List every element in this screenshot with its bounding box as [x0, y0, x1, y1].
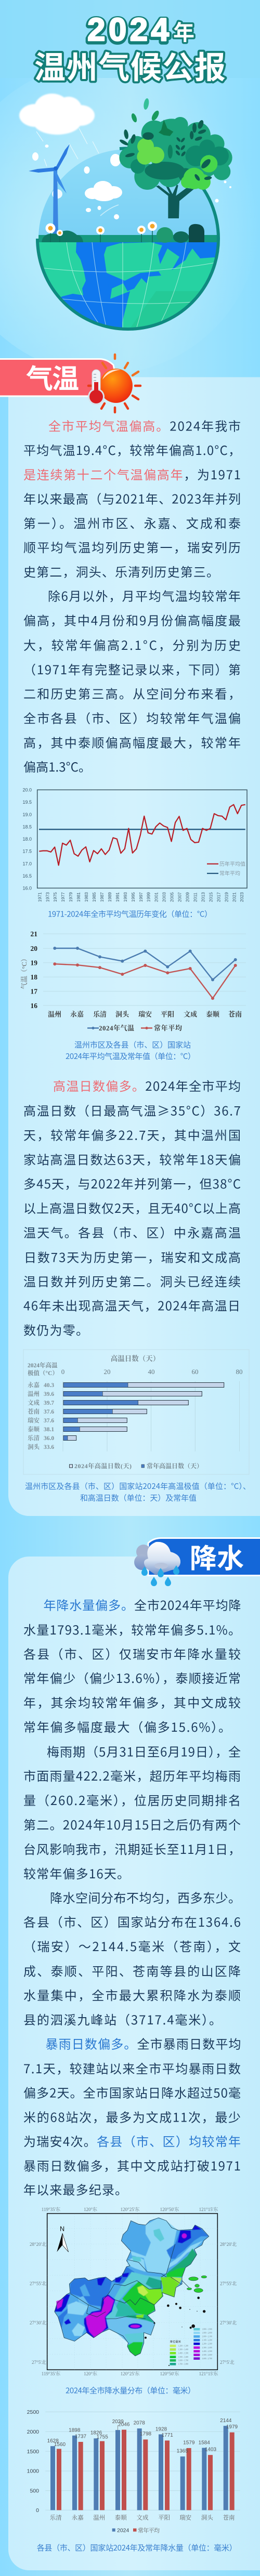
- y axis labels: [22, 787, 32, 891]
- category labels: [48, 1011, 242, 1018]
- legend: [207, 860, 245, 877]
- row labels: 39.7: [44, 1400, 54, 1406]
- line chart: annual temperature 1971-2024: [22, 787, 247, 902]
- row labels: 38.1: [44, 1427, 54, 1433]
- text block: annual precipitation: 台风影响我市，汛期延长至11月1日，: [23, 1839, 241, 1858]
- text block: annual mean temperature: 大，较常年偏高2.1°C，分别为历史: [23, 635, 241, 653]
- value labels: 1979: [226, 2424, 238, 2430]
- category labels: 苍南: [223, 2514, 235, 2521]
- row labels: 37.6: [44, 1418, 54, 1424]
- year labels: 1989: [107, 892, 112, 902]
- row labels: [28, 1381, 54, 1450]
- category labels: 永嘉: [72, 2514, 84, 2521]
- value labels: 1755: [97, 2435, 108, 2440]
- year labels: 2023: [239, 892, 244, 902]
- legend: 1,600 - 1,700: [178, 2360, 188, 2362]
- legend: 2024年高温日数(天): [74, 1462, 132, 1470]
- row labels: 永嘉: [28, 1381, 40, 1389]
- icon: rain cloud: [134, 1542, 180, 1586]
- y axis labels: 2500: [27, 2409, 39, 2415]
- y axis labels: 16: [30, 1002, 37, 1010]
- heading text: 降水: [190, 1537, 244, 1576]
- year labels: 2011: [192, 892, 198, 902]
- text block: annual precipitation: 常年偏少（偏少13.6%），泰顺接近常: [23, 1668, 241, 1686]
- year labels: 2005: [170, 892, 175, 902]
- row labels: 33.6: [44, 1444, 54, 1450]
- text block: annual precipitation: 降水空间分布不均匀，西多东少。: [50, 1888, 241, 1906]
- y axis labels: 20: [30, 945, 37, 952]
- text block: annual mean temperature: 偏高1.3°C。: [23, 757, 91, 775]
- value labels: 1928: [155, 2426, 167, 2432]
- caption: county temperature chart: 2024年平均气温及常年值（单位：°C）: [66, 1051, 196, 1062]
- legend: 1,200 - 1,300: [178, 2345, 188, 2348]
- legend: 1,400 - 1,500: [178, 2352, 188, 2355]
- text block: high temperature days: [23, 1076, 241, 1338]
- text block: high temperature days: 高温日数（日最高气温≥35°C）36.7: [23, 1101, 241, 1119]
- cloud above globe: [19, 94, 95, 135]
- inner clouds and drops: [52, 154, 122, 219]
- row labels: 37.6: [44, 1409, 54, 1415]
- text block: annual mean temperature: [23, 416, 241, 775]
- graticule: [47, 2214, 217, 2370]
- value labels: 1560: [54, 2442, 66, 2448]
- value labels: 2078: [134, 2421, 145, 2426]
- text block: annual precipitation: 米的68站次，最多为文成11次，最少: [23, 2108, 241, 2126]
- category labels: 永嘉: [70, 1011, 84, 1018]
- row labels: 苍南: [28, 1408, 40, 1415]
- county boundaries: [55, 2218, 209, 2356]
- text block: annual mean temperature: （1971年有完整记录以来，下同）第: [23, 660, 241, 678]
- text block: high temperature days: 天，较常年偏多22.7天，其中温州国: [23, 1125, 241, 1144]
- row labels: 泰顺: [28, 1426, 40, 1433]
- legend: 单位毫米: [170, 2339, 181, 2344]
- y axis labels: [30, 930, 37, 1010]
- bars 2024: [50, 2426, 228, 2510]
- value labels: 1798: [140, 2431, 152, 2437]
- text block: high temperature days: 温天气。各县（市、区）中永嘉高温: [23, 1223, 241, 1241]
- year labels: 2001: [154, 892, 159, 902]
- caption: high temperature chart: 温州市区及各县（市、区）国家站2024年高温极值（单位：°C）、: [25, 1481, 251, 1492]
- category labels: 泰顺: [206, 1011, 220, 1018]
- year labels: 1985: [92, 892, 97, 902]
- panel: temperature: [8, 377, 260, 1516]
- text block: annual mean temperature: 年以来最高（与2021年、2023年并列: [23, 489, 241, 507]
- text block: high temperature days: 家站高温日数达63天，较常年18天偏: [23, 1150, 241, 1168]
- legend: 2,400 - 2,500: [202, 2350, 212, 2353]
- text block: annual precipitation: 年降水量偏多。全市2024年平均降: [44, 1596, 241, 1614]
- caption: county temperature chart: 温州市区及各县（市、区）国家站: [74, 1039, 191, 1050]
- y axis labels: 500: [30, 2488, 39, 2494]
- year labels: [37, 892, 244, 902]
- y axis labels: 0: [36, 2507, 39, 2514]
- legend: [112, 2527, 160, 2534]
- panel: precipitation: [8, 1557, 260, 2570]
- value labels: [47, 2418, 238, 2454]
- row labels: 洞头: [28, 1443, 40, 1450]
- column heading: 极值（°C）: [28, 1369, 58, 1377]
- y axis labels: 19.5: [22, 800, 32, 805]
- value labels: 1365: [177, 2449, 188, 2454]
- map coordinate labels: 28°20'北: [220, 2241, 237, 2247]
- text block: annual precipitation: 暴雨日数偏多，其中文成站打破1971: [23, 2156, 241, 2174]
- legend: 常年平均: [138, 2527, 160, 2534]
- heading text: 气温: [26, 357, 79, 396]
- y axis labels: 19: [30, 959, 37, 967]
- map coordinate labels: 27°55'北: [30, 2280, 46, 2286]
- column heading: 2024年高温: [28, 1362, 58, 1369]
- year labels: 1987: [99, 892, 105, 902]
- line chart: county temperatures: [20, 930, 246, 1032]
- north arrow: N: [60, 2226, 64, 2233]
- value labels: 1826: [90, 2430, 102, 2436]
- x axis labels: 20: [104, 1368, 110, 1376]
- caption: county temperature chart: [66, 1039, 196, 1062]
- row labels: 39.6: [44, 1391, 54, 1397]
- legend: 历年平均值: [219, 860, 245, 867]
- bars: [63, 1383, 224, 1440]
- map coordinate labels: 28°20'北: [30, 2241, 46, 2247]
- y axis labels: 18.5: [22, 825, 32, 830]
- map coordinate labels: 119°35'东: [42, 2206, 60, 2212]
- legend: [70, 1462, 203, 1470]
- title: [34, 12, 226, 88]
- column heading: [28, 1362, 58, 1377]
- category labels: 平阳: [161, 1011, 174, 1018]
- text block: annual precipitation: 水量1793.1毫米，较常年偏多5.1%。: [23, 1620, 241, 1638]
- text block: annual precipitation: 水量集中，全市最大累积降水为泰顺: [23, 1985, 241, 2004]
- text block: annual precipitation: 梅雨期（5月31日至6月19日），全: [47, 1742, 241, 1760]
- legend: 1,300 - 1,400: [178, 2349, 188, 2351]
- text block: annual mean temperature: 平均气温19.4°C，较常年偏高1.0°C，: [23, 440, 241, 459]
- value labels: 1584: [199, 2440, 210, 2446]
- y axis labels: [27, 2409, 39, 2514]
- legend: [170, 2328, 212, 2366]
- text block: annual mean temperature: 是连续第十二个气温偏高年，为1971: [23, 465, 241, 483]
- legend: 1,500 - 1,600: [178, 2356, 188, 2359]
- bars normal: [57, 2430, 235, 2510]
- map coordinate labels: 119°35'东: [42, 2371, 60, 2376]
- year labels: 1991: [115, 892, 120, 902]
- value labels: 1628: [47, 2438, 59, 2444]
- islands: [187, 2276, 207, 2293]
- text block: high temperature days: 温日数并列历史第二。洞头已经连续: [23, 1272, 241, 1290]
- map: 2024 precipitation distribution: [30, 2206, 237, 2376]
- legend: 2,100 - 2,200: [202, 2339, 212, 2342]
- text block: annual precipitation: 暴雨日数偏多。全市暴雨日数平均: [46, 2034, 241, 2052]
- value labels: 1579: [183, 2440, 195, 2446]
- y axis labels: 20.0: [22, 787, 32, 792]
- text block: annual precipitation: 第二。2024年10月15日之后仍有两个: [23, 1815, 241, 1833]
- map coordinate labels: 120°25'东: [121, 2206, 139, 2212]
- globe lower hemisphere: [38, 154, 217, 328]
- text block: high temperature days: 日数73天为历史第一，瑞安和文成高: [24, 1247, 241, 1265]
- legend: 常年平均: [154, 1024, 182, 1032]
- north arrow: [57, 2226, 69, 2252]
- tree: [119, 98, 232, 218]
- y axis labels: 18.0: [22, 836, 32, 842]
- year labels: 1999: [146, 892, 151, 902]
- caption: precipitation map: 2024年全市降水量分布（单位：毫米）: [66, 2385, 196, 2396]
- text block: annual precipitation: 常年偏多幅度最大（偏多15.6%）。: [23, 1717, 231, 1735]
- legend: 1,900 - 2,000: [202, 2332, 212, 2335]
- map coordinate labels: 120°25'东: [121, 2371, 139, 2376]
- category labels: 洞头: [115, 1011, 129, 1018]
- year labels: 1971: [37, 892, 42, 902]
- year labels: 2009: [185, 892, 190, 902]
- text block: annual precipitation: 年，其余均较常年偏多，其中文成较: [23, 1693, 241, 1711]
- text block: high temperature days: 数仍为零。: [23, 1320, 88, 1338]
- category labels: 瑞安: [179, 2514, 192, 2521]
- illustration: earth with tree and wind turbine: [19, 94, 232, 336]
- text block: annual precipitation: 市面雨量422.2毫米，超历年平均梅雨: [23, 1766, 241, 1784]
- legend: 2,200 - 2,300: [202, 2343, 212, 2346]
- year labels: 1981: [76, 892, 81, 902]
- row labels: 40.3: [44, 1382, 54, 1389]
- text block: annual precipitation: 成、泰顺、平阳、苍南等县的山区降: [23, 1962, 241, 1980]
- year labels: 2013: [200, 892, 205, 902]
- category labels: 苍南: [228, 1011, 242, 1018]
- y axis labels: 17.0: [22, 861, 32, 866]
- category labels: 乐清: [50, 2514, 62, 2521]
- map coordinate labels: 120°东: [84, 2371, 97, 2376]
- blue title band: [148, 1538, 260, 1575]
- caption: high temperature chart: 和高温日数（单位：天）及常年值: [80, 1492, 197, 1503]
- x axis labels: 60: [191, 1368, 199, 1376]
- map coordinate labels: 27°30'北: [220, 2320, 237, 2325]
- map coordinate labels: 27°5'北: [220, 2359, 235, 2365]
- text block: annual mean temperature: 全市各县（市、区）均较常年气温偏: [23, 708, 241, 727]
- year labels: 1995: [131, 892, 136, 902]
- year labels: 1975: [53, 892, 58, 902]
- row labels: 乐清: [28, 1434, 40, 1442]
- text block: annual precipitation: 为瑞安4次。各县（市、区）均较常年: [23, 2132, 241, 2150]
- globe sky: [38, 149, 217, 328]
- x axis labels: 80: [236, 1368, 242, 1376]
- text block: annual mean temperature: 全市平均气温偏高。2024年我市: [48, 416, 241, 434]
- series 2024: [53, 947, 237, 982]
- bar chart: high temperature days: [23, 1350, 249, 1474]
- flowers and bushes: [42, 221, 204, 243]
- y axis labels: 1500: [27, 2449, 39, 2455]
- text block: annual mean temperature: 史第二，洞头、乐清列历史第三。: [23, 562, 219, 580]
- caption: precipitation bar chart: 各县（市、区）国家站2024年及常年降水量（单位：毫米）: [37, 2542, 237, 2553]
- text block: annual mean temperature: 高，其中泰顺偏高幅度最大，较常年: [23, 733, 241, 751]
- bar chart: precipitation by county: [27, 2409, 240, 2534]
- text block: annual precipitation: 各县（市、区）仅瑞安市年降水量较: [23, 1644, 241, 1663]
- year labels: 1977: [60, 892, 66, 902]
- y axis labels: 19.0: [22, 812, 32, 817]
- x axis labels: [61, 1368, 242, 1376]
- value labels: 2039: [112, 2419, 124, 2425]
- value labels: 1737: [75, 2434, 87, 2439]
- title: 2024: [87, 12, 170, 48]
- text block: high temperature days: 多45天，与2022年并列第一，但38°C: [23, 1174, 241, 1192]
- axis title: 气温（°C）: [20, 955, 28, 989]
- map coordinate labels: 120°50'东: [160, 2206, 179, 2212]
- chart title: 高温日数（天）: [111, 1354, 160, 1363]
- text block: annual precipitation: 各县（市、区）国家站分布在1364.6: [23, 1912, 241, 1930]
- value labels: 2144: [220, 2418, 232, 2424]
- text block: high temperature days: 46年未出现高温天气，2024年高温日: [23, 1296, 240, 1314]
- legend: 2,600 - 2,700: [202, 2358, 212, 2360]
- value labels: 2046: [118, 2422, 130, 2427]
- category labels: 泰顺: [115, 2514, 127, 2521]
- year labels: 1993: [123, 892, 128, 902]
- y axis labels: 18: [30, 973, 37, 981]
- y axis labels: 1000: [27, 2468, 39, 2475]
- row labels: 文成: [28, 1399, 40, 1406]
- year labels: 2021: [231, 892, 237, 902]
- year labels: 2007: [177, 892, 183, 902]
- x axis labels: 40: [148, 1368, 155, 1376]
- legend: 1,700 - 1,800: [178, 2363, 188, 2366]
- text block: annual mean temperature: 偏高，其中4月份和9月份偏高幅度最: [23, 610, 241, 629]
- text block: annual precipitation: [23, 1596, 241, 2198]
- text block: annual mean temperature: 顺平均气温均列历史第一，瑞安列历: [23, 538, 241, 556]
- title: 温州气候公报: [34, 43, 226, 88]
- category labels: 乐清: [93, 1011, 107, 1018]
- caption: annual temperature chart: 1971-2024年全市平均气温历年变化（单位：°C）: [48, 909, 212, 919]
- text block: high temperature days: 高温日数偏多。2024年全市平均: [53, 1076, 241, 1094]
- year labels: 2019: [224, 892, 229, 902]
- year labels: 1997: [138, 892, 144, 902]
- section header: temperature: [0, 355, 140, 412]
- row labels: 36.0: [44, 1435, 54, 1442]
- text block: annual precipitation: 偏多2天。全市国家站日降水超过50毫: [23, 2083, 241, 2101]
- rain streaks and drops outside globe: [32, 128, 231, 203]
- text block: annual precipitation: （瑞安）～2144.5毫米（苍南），文: [23, 1937, 241, 1955]
- text block: annual precipitation: 量（260.2毫米），位居历史同期排名: [23, 1790, 241, 1809]
- text block: annual precipitation: 7.1天，较建站以来全市平均暴雨日数: [23, 2059, 241, 2077]
- text block: annual precipitation: 县的泗溪九峰站（3717.4毫米）。: [23, 2010, 222, 2028]
- y axis labels: 16.0: [22, 886, 32, 891]
- year labels: 1979: [68, 892, 73, 902]
- caption: high temperature chart: [25, 1481, 251, 1503]
- map coordinate labels: 121°15'东: [199, 2206, 218, 2212]
- y axis labels: 17: [30, 988, 37, 995]
- text block: annual mean temperature: 二和历史第三高。从空间分布来看，: [23, 684, 241, 702]
- y axis labels: 17.5: [22, 849, 32, 854]
- category labels: 温州: [48, 1011, 61, 1018]
- legend: 常年平均: [219, 869, 240, 877]
- row labels: 瑞安: [28, 1417, 40, 1424]
- value labels: 1771: [162, 2433, 173, 2438]
- map coordinate labels: 27°55'北: [220, 2280, 237, 2286]
- legend: [87, 1024, 182, 1032]
- icon: sun: [88, 355, 140, 412]
- value labels: 1403: [205, 2447, 217, 2453]
- text block: high temperature days: 以上高温日数仅2天，且无40°C以上高: [23, 1198, 241, 1217]
- annual series: [39, 805, 245, 865]
- title: 年: [173, 15, 194, 46]
- legend: 2,500 - 2,600: [202, 2354, 212, 2357]
- year labels: 2017: [216, 892, 221, 902]
- text block: annual precipitation: 年以来最多纪录。: [23, 2180, 127, 2198]
- map coordinate labels: 120°50'东: [160, 2371, 179, 2376]
- category labels: 文成: [184, 1011, 197, 1018]
- wind turbine: [29, 144, 70, 235]
- category labels: [50, 2514, 235, 2521]
- year labels: 1973: [45, 892, 50, 902]
- category labels: 瑞安: [138, 1011, 152, 1018]
- legend: 1,800 - 1,900: [202, 2329, 212, 2331]
- y axis labels: 2000: [27, 2429, 39, 2435]
- category labels: 平阳: [158, 2514, 170, 2521]
- y axis labels: 16.5: [22, 873, 32, 879]
- map coordinate labels: 27°30'北: [30, 2320, 46, 2325]
- y axis labels: 21: [30, 930, 37, 938]
- legend: 2,300 - 2,400: [202, 2347, 212, 2349]
- legend: 常年高温日数（天）: [147, 1462, 203, 1470]
- text block: annual mean temperature: 第一）。温州市区、永嘉、文成和泰: [23, 513, 241, 531]
- x axis labels: 0: [61, 1368, 64, 1376]
- year labels: 1983: [84, 892, 89, 902]
- legend: 2024: [117, 2528, 129, 2534]
- map coordinate labels: 120°东: [84, 2206, 97, 2212]
- year labels: 2015: [208, 892, 213, 902]
- map coordinate labels: 27°5'北: [32, 2359, 46, 2365]
- legend: 2,000 - 2,100: [202, 2336, 212, 2338]
- section header: precipitation: [134, 1537, 260, 1586]
- row labels: 温州: [28, 1390, 40, 1397]
- precipitation regions: [55, 2218, 209, 2356]
- globe outline: [37, 148, 218, 329]
- map coordinate labels: [30, 2206, 237, 2376]
- ground band: [31, 235, 229, 242]
- category labels: 文成: [136, 2514, 149, 2521]
- icon: thermometer: [88, 370, 105, 405]
- category labels: 温州: [93, 2514, 105, 2521]
- title: 2024: [87, 13, 170, 49]
- legend: 2024年气温: [99, 1024, 134, 1032]
- year labels: 2003: [162, 892, 167, 902]
- map coordinate labels: 121°15'东: [199, 2371, 218, 2376]
- text block: annual precipitation: 较常年偏多16天。: [23, 1864, 129, 1882]
- value labels: 1898: [69, 2428, 81, 2434]
- series normal: [53, 962, 237, 1000]
- red title band: [0, 359, 120, 396]
- category labels: 洞头: [201, 2514, 213, 2521]
- normal line: [39, 829, 245, 830]
- text block: annual mean temperature: 除6月以外，月平均气温均较常年: [48, 586, 241, 605]
